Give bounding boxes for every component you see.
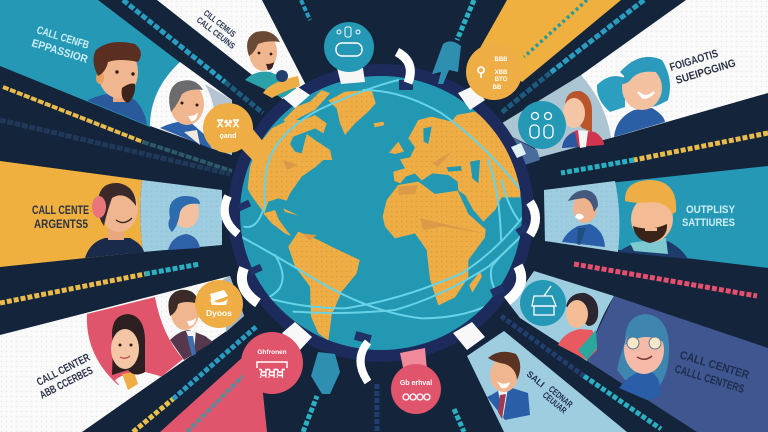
circle: yellow top right: BB <box>493 85 502 91</box>
person: long-haired woman <box>111 314 160 392</box>
circle: yellow top right: XBB <box>495 70 508 76</box>
circle: red bottom icon: Gb erhval <box>400 380 432 387</box>
panel: call center agents <box>0 161 222 267</box>
label: bottom light blue: CEDNAR <box>547 384 575 410</box>
circle: yellow top right: BBB <box>494 57 508 63</box>
person: young man with phone <box>245 31 300 98</box>
label: bottom left call centers: ABB CCERBES <box>38 365 95 402</box>
circle: teal lower right icon <box>520 280 566 326</box>
label: bottom left call centers <box>35 352 95 402</box>
label: call center expansion: EPPASSIOR <box>30 37 89 66</box>
connector: white bottom right <box>453 322 485 350</box>
phone handset: bottom <box>354 331 372 382</box>
label: top white panel: CILL CEMUS <box>202 8 238 39</box>
globe <box>228 64 534 362</box>
person: blue-haired agent <box>168 196 200 250</box>
panel: bottom red wedge <box>160 356 267 432</box>
label: call center agents: ARGENTS5 <box>34 219 89 231</box>
person: man in blue suit <box>487 352 530 420</box>
circle: yellow top right: BTO <box>495 77 508 83</box>
panel: top right supporting <box>494 0 768 168</box>
land: africa <box>383 182 486 305</box>
panel: top yellow wedge <box>480 0 621 82</box>
circle: yellow top right: ⚲ <box>476 64 486 79</box>
label: top white panel: CALL CEUINS <box>195 15 237 51</box>
connector: white top right <box>458 86 485 110</box>
circle: red lower left icon <box>241 332 303 394</box>
panel: call center expansion <box>0 0 232 155</box>
land: madagascar <box>469 272 482 293</box>
land: south america <box>288 232 360 341</box>
person: red-haired woman <box>562 91 604 148</box>
land relief <box>283 152 485 241</box>
panel: bottom light blue <box>467 331 627 432</box>
person: dark-haired man <box>562 190 605 247</box>
circle: yellow lower left icon: Dyoos <box>206 308 232 318</box>
circle: yellow top left: ⴳ⚒ⴳ <box>216 119 239 130</box>
connector: white lower left <box>282 322 312 350</box>
land: north america <box>248 115 332 213</box>
panel: bottom right call centers <box>510 271 768 432</box>
person: grey-haired man <box>160 80 212 149</box>
seas <box>423 127 480 183</box>
label: call center expansion <box>30 24 90 66</box>
land: arctic islands <box>283 90 330 125</box>
label: outplay satisfaction: SATTIURES <box>682 217 735 229</box>
phone handset: lower right <box>490 266 521 301</box>
label: supporting <box>668 48 737 87</box>
connector: white top left <box>283 87 310 108</box>
label: supporting: SUEIPGGING <box>674 57 737 87</box>
label: call center expansion: CALL CENFB <box>35 24 90 52</box>
label: bottom right call centers: CALL CENTER <box>678 349 751 382</box>
continents <box>235 80 530 341</box>
phone handset: left <box>225 196 251 234</box>
ocean <box>240 76 522 350</box>
plug: top <box>432 41 461 84</box>
label: outplay satisfaction: OUTPLISY <box>686 204 736 216</box>
circle: red lower left icon: Ghfronen <box>257 349 287 356</box>
label: bottom light blue: SALI <box>525 369 546 389</box>
circle: red lower left icon: ਖ਼ਖ਼ਖ਼ <box>259 365 285 380</box>
person: blue-haired woman with headset <box>597 57 670 137</box>
circle: yellow top left <box>203 103 253 153</box>
person: man in suit <box>168 290 213 360</box>
panel: bottom left call centers <box>0 276 244 432</box>
label: bottom light blue: CEUUAR <box>541 390 569 416</box>
globe ring <box>228 64 534 362</box>
circle: teal top icon <box>324 22 374 72</box>
land: cuba <box>283 208 298 215</box>
label: bottom left call centers: CALL CENTER <box>35 352 92 389</box>
badge: right white tag <box>511 143 526 158</box>
plug: bottom <box>311 352 340 394</box>
person: woman in sari <box>558 293 598 360</box>
land: greenland <box>328 90 376 135</box>
cable network <box>235 80 530 318</box>
land: iceland <box>373 122 384 127</box>
circle: yellow top right <box>466 44 522 100</box>
panel: outplay satisfaction <box>544 166 768 268</box>
circle: yellow lower left icon <box>195 280 243 328</box>
label: top white panel <box>195 8 238 51</box>
label: supporting: FOIGAOTIS <box>668 48 720 74</box>
person: bearded man <box>88 42 147 125</box>
label: call center agents <box>32 205 89 231</box>
phone handset: right <box>515 202 536 236</box>
circle: red bottom icon <box>391 364 441 414</box>
circle: yellow top left: ϙand <box>220 133 236 140</box>
person: man with yellow cap and beard <box>618 180 688 259</box>
connector: yellow top left <box>238 128 270 170</box>
land: central america <box>263 210 291 236</box>
label: bottom right call centers: CALLL CENTERS <box>673 363 746 396</box>
label: outplay satisfaction <box>682 204 736 229</box>
circle: teal right icon <box>518 101 566 149</box>
connector: white top <box>337 68 365 84</box>
person: woman with glasses <box>617 314 669 400</box>
label: bottom light blue <box>525 369 575 416</box>
phone handset: lower left <box>242 264 263 303</box>
land: uk <box>389 142 404 154</box>
panel: top white call centers <box>157 0 312 108</box>
label: bottom right call centers <box>673 349 751 396</box>
phone handset: top <box>397 52 413 90</box>
label: call center agents: CALL CENTE <box>32 205 89 217</box>
land: eurasia <box>393 112 521 222</box>
person: headset agent <box>85 183 144 258</box>
connector: pink bottom <box>400 348 427 372</box>
